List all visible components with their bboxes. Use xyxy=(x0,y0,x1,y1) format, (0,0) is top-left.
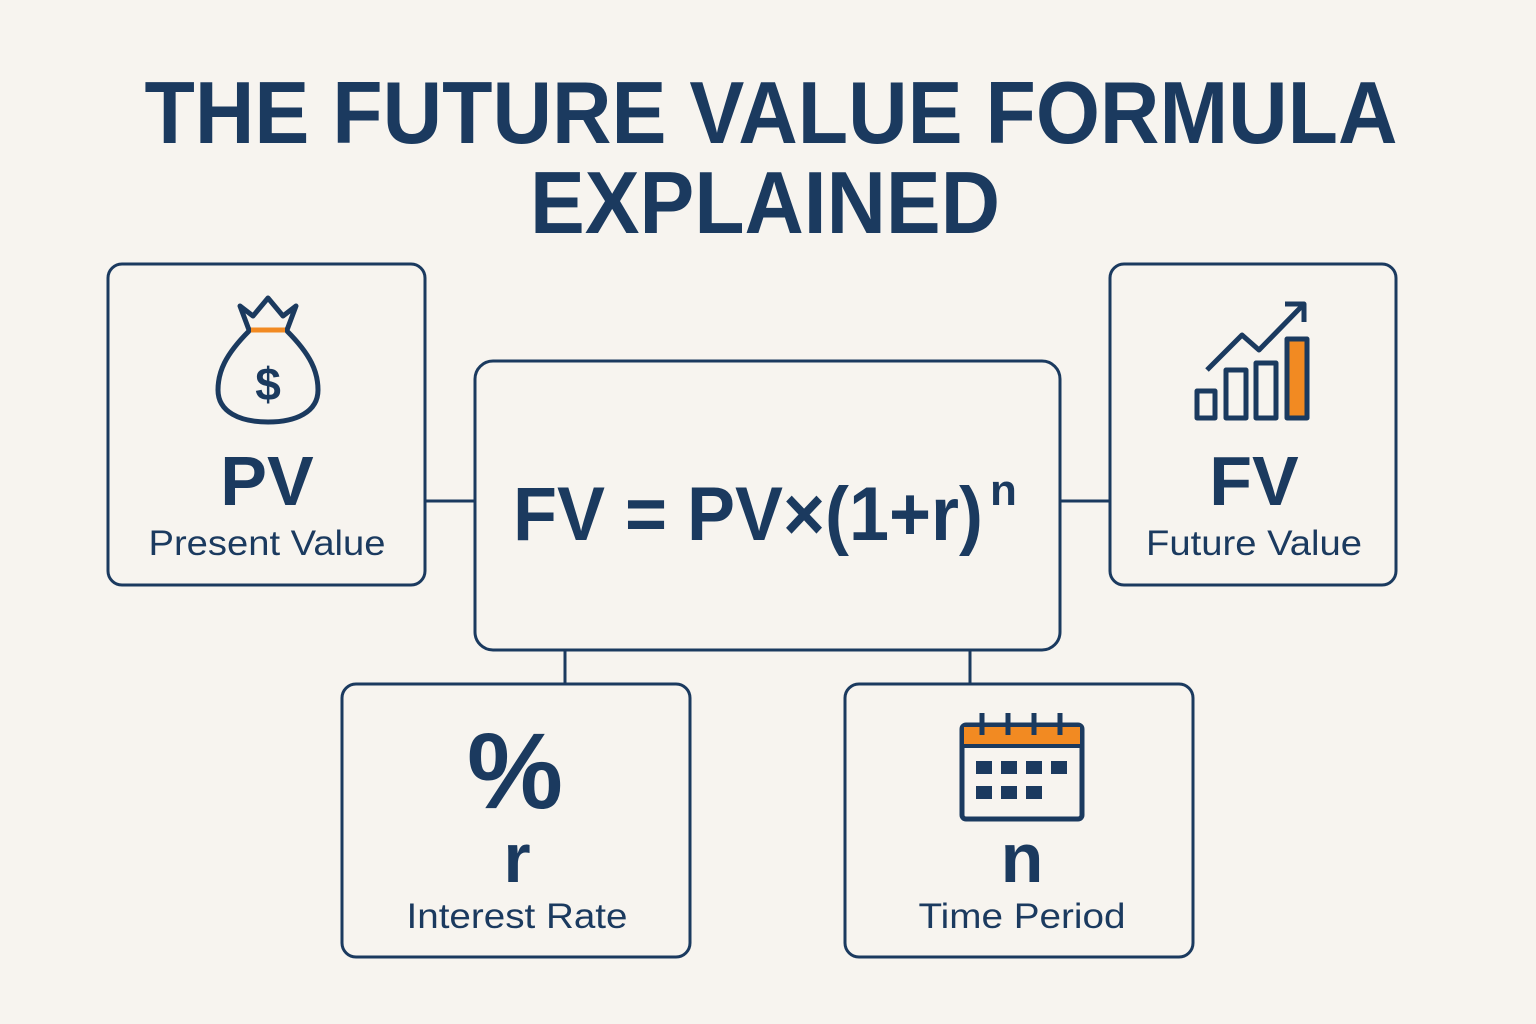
panel: formula: n xyxy=(990,466,1017,515)
icon: money bag xyxy=(218,298,318,422)
panel: formula xyxy=(475,361,1060,650)
panel: future value: Future Value xyxy=(1146,524,1362,563)
panel: time period: Time Period xyxy=(918,897,1126,936)
panel: formula: FV = PV×(1+r) xyxy=(513,472,983,557)
panel: future value: FV xyxy=(1209,442,1299,520)
panel: future value xyxy=(1110,264,1396,585)
panel: time period: n xyxy=(1001,819,1043,897)
icon: money bag: $ xyxy=(255,358,281,410)
title xyxy=(144,63,1398,252)
panel: present value: PV xyxy=(220,442,314,520)
panel: interest rate: r xyxy=(503,819,531,897)
icon: calendar xyxy=(962,713,1082,819)
icon: percent: % xyxy=(467,710,563,831)
title: EXPLAINED xyxy=(530,153,1000,252)
panel: time period xyxy=(845,684,1193,957)
panel: present value xyxy=(108,264,425,585)
panel: present value: Present Value xyxy=(148,524,386,563)
panel: interest rate: Interest Rate xyxy=(406,897,628,936)
icon: growth chart xyxy=(1197,304,1307,418)
title: THE FUTURE VALUE FORMULA xyxy=(144,63,1398,162)
panel: interest rate xyxy=(342,684,690,957)
